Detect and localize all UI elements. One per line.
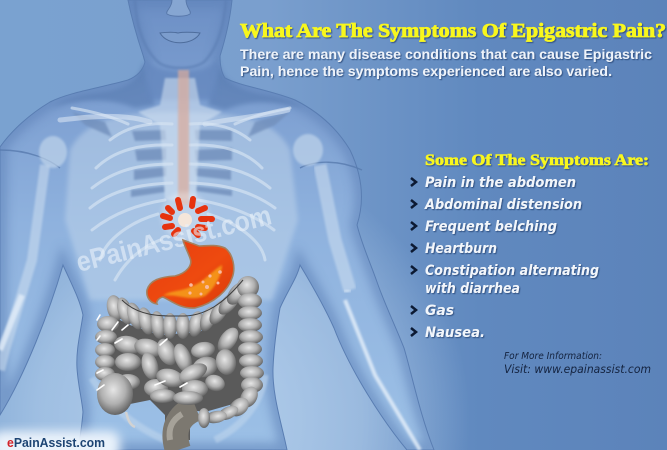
symptoms list: with diarrhea — [425, 281, 520, 297]
rib cage — [60, 78, 298, 300]
nose — [167, 0, 190, 16]
symptoms list: Abdominal distension — [424, 197, 582, 213]
human body silhouette — [0, 0, 434, 450]
shoulder shading — [52, 62, 155, 108]
taenia line — [122, 280, 243, 316]
symptoms heading: Some Of The Symptoms Are: — [425, 152, 649, 169]
title: What Are The Symptoms Of Epigastric Pain? — [240, 20, 666, 42]
symptoms list: Constipation alternating — [425, 263, 599, 279]
torso and head — [0, 0, 434, 450]
soft inner edge shading — [0, 0, 434, 450]
colon segments — [95, 276, 264, 428]
dark base mass — [100, 300, 255, 440]
appendix — [126, 412, 135, 427]
lips — [160, 32, 200, 43]
arm bones — [0, 134, 420, 450]
symptoms list: Pain in the abdomen — [425, 175, 576, 191]
sternum and neck vertebrae — [138, 78, 222, 200]
bullet chevrons — [411, 178, 416, 336]
intestines — [95, 276, 264, 450]
symptoms list — [424, 175, 599, 341]
intro paragraph: There are many disease conditions that can cause Epigastric — [240, 47, 653, 62]
more information note: For More Information: — [504, 351, 602, 362]
rectum — [175, 408, 196, 450]
symptoms list: Nausea. — [425, 325, 485, 341]
symptoms list: Frequent belching — [425, 219, 557, 235]
symptoms list: Gas — [425, 303, 454, 319]
intercostal spaces — [72, 112, 290, 197]
cecum — [97, 373, 133, 415]
footer logo: ePainAssist.com — [7, 435, 105, 450]
watermark: ePainAssist.com — [73, 199, 275, 278]
stomach — [147, 240, 234, 308]
clavicles — [60, 110, 288, 124]
neck shading — [145, 60, 218, 100]
jaw line — [135, 0, 226, 68]
esophagus — [178, 70, 189, 205]
symptoms list: Heartburn — [425, 241, 497, 257]
small white highlights — [97, 315, 187, 390]
arm creases — [0, 150, 362, 170]
footer logo — [0, 431, 120, 450]
pelvis — [92, 375, 265, 440]
intro paragraph: Pain, hence the symptoms experienced are also varied. — [240, 64, 612, 79]
small intestine loops — [113, 324, 243, 405]
pain burst — [161, 192, 212, 240]
intro paragraph — [240, 47, 653, 79]
more information note — [504, 351, 651, 376]
more information note: Visit: www.epainassist.com — [504, 362, 651, 376]
ribs — [72, 108, 290, 280]
